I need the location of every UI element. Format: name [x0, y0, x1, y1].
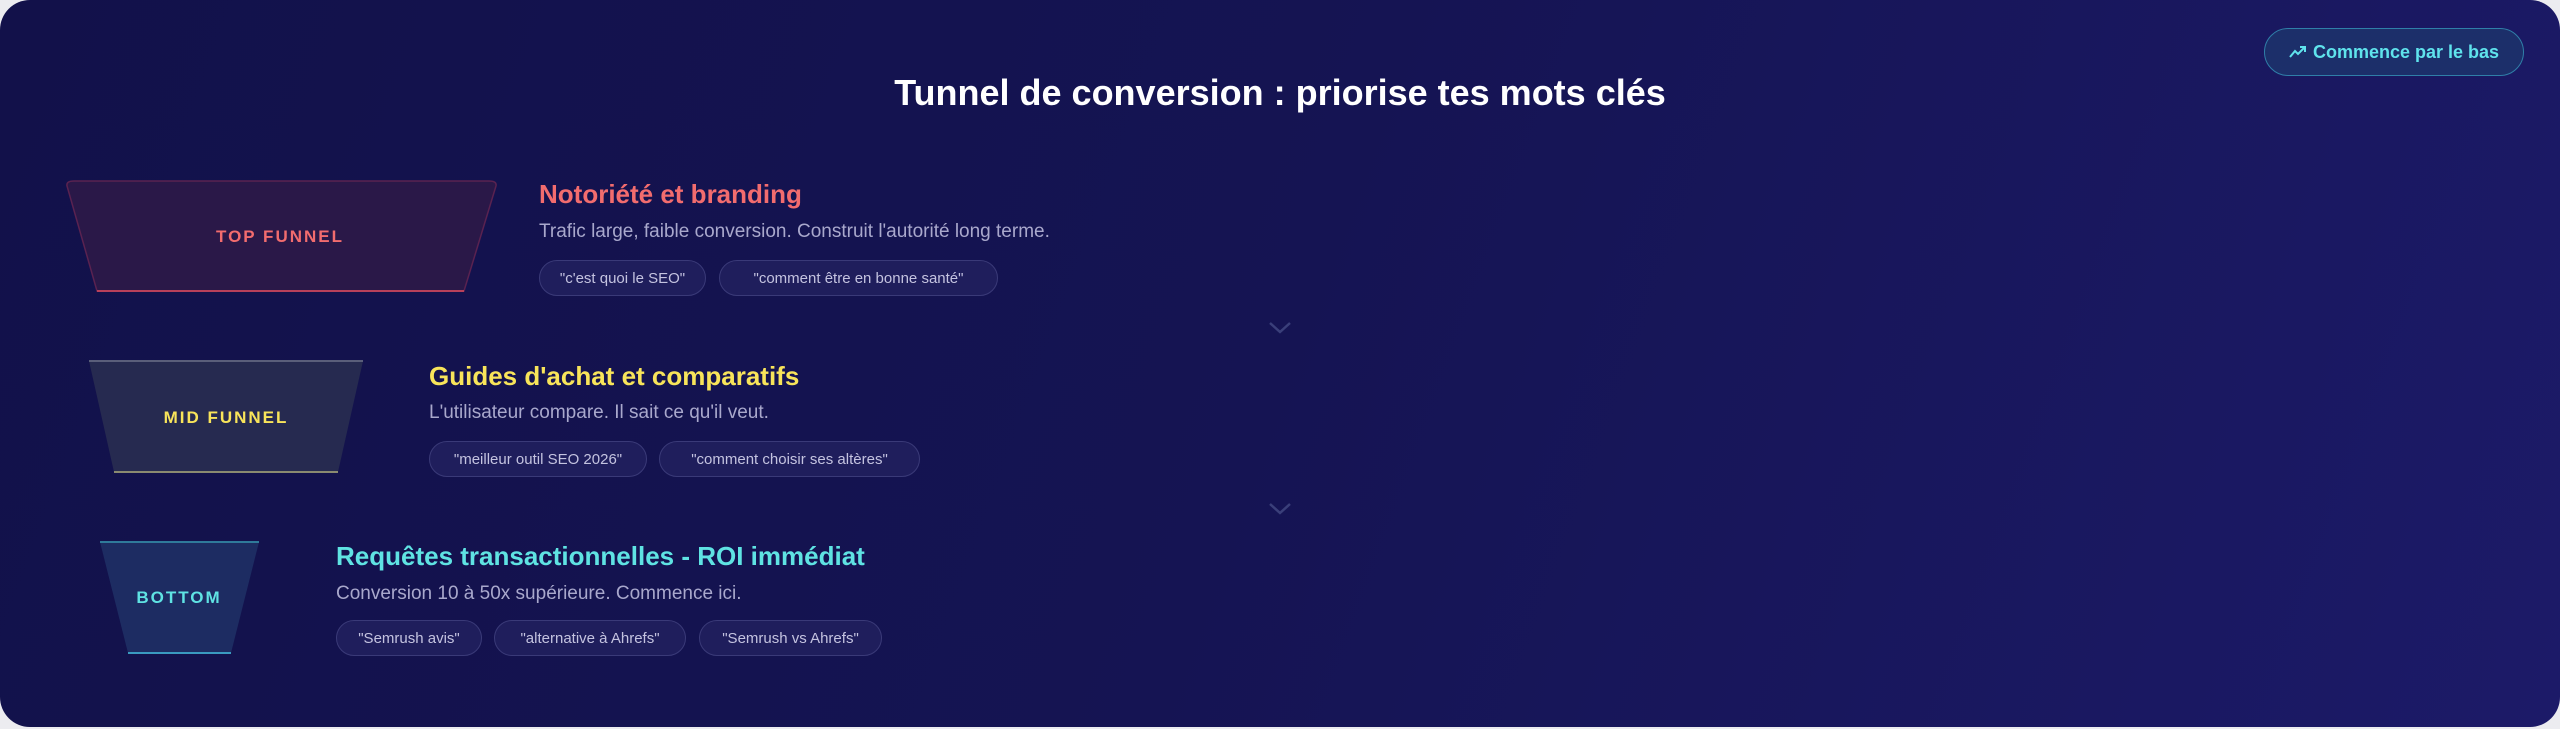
heading: notoriete: Notoriété et branding	[539, 179, 802, 209]
tags: bottom	[336, 620, 882, 656]
tags: top: "comment être en bonne santé"	[754, 270, 963, 286]
funnel stage: bottom: BOTTOM	[136, 588, 222, 607]
tags: mid: "meilleur outil SEO 2026"	[454, 450, 622, 468]
arrow: chevron 1	[1269, 322, 1291, 334]
desc: top: Trafic large, faible conversion. Construit l'autorité long terme.	[539, 221, 1050, 242]
funnel stage: mid	[89, 360, 363, 473]
heading: requetes: Requêtes transactionnelles - ROI immédiat	[336, 541, 865, 571]
heading: guides: Guides d'achat et comparatifs	[429, 361, 799, 391]
tags: top	[539, 260, 998, 296]
button: commence par le bas: Commence par le bas	[2313, 42, 2499, 62]
tags: mid: "comment choisir ses altères"	[691, 450, 888, 468]
arrow: chevron 2	[1269, 503, 1291, 514]
tags: bottom: "Semrush vs Ahrefs"	[722, 630, 859, 646]
funnel stage: top	[66, 180, 497, 292]
tags: mid	[429, 441, 920, 477]
trapezoid: top funnel	[66, 180, 497, 292]
trapezoid: top funnel: TOP FUNNEL	[216, 227, 344, 246]
button: commence par le bas	[2264, 28, 2524, 76]
title: Tunnel de conversion : priorise tes mots clés	[894, 72, 1666, 113]
desc: mid: L'utilisateur compare. Il sait ce qu'il veut.	[429, 402, 769, 423]
funnel stage: mid: MID FUNNEL	[164, 408, 288, 427]
desc: bottom: Conversion 10 à 50x supérieure. Commence ici.	[336, 583, 742, 604]
tags: bottom: "alternative à Ahrefs"	[520, 630, 660, 646]
funnel stage: bottom	[100, 541, 259, 654]
tags: bottom: "Semrush avis"	[358, 630, 460, 646]
tags: top: "c'est quoi le SEO"	[560, 270, 685, 286]
